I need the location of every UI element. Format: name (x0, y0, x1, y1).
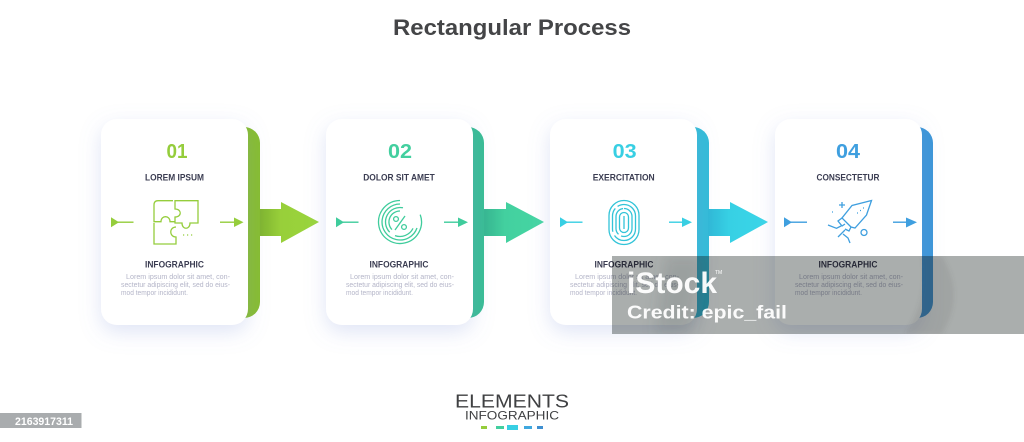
watermark band (612, 256, 1024, 334)
output arrow (444, 218, 468, 227)
icon: rocket (828, 200, 872, 243)
image id badge: 2163917311 (15, 416, 73, 428)
number 03: 03 (613, 141, 637, 163)
watermark credit: Credit: epic_fail (627, 302, 787, 322)
output arrow (220, 218, 244, 227)
arrow: step 1 to 2 (260, 202, 319, 243)
input arrow (784, 217, 807, 227)
body text: mod tempor incididunt. (570, 290, 637, 297)
watermark brand: iStock (627, 267, 717, 300)
back tab: step 1 (215, 127, 260, 318)
heading: dolor sit amet: DOLOR SIT AMET (363, 173, 435, 183)
label: infographic: INFOGRAPHIC (370, 260, 429, 270)
label: infographic: INFOGRAPHIC (818, 260, 878, 270)
trademark: TM (715, 270, 722, 276)
back tab: step 4 (889, 127, 933, 318)
panel: step 3 (550, 119, 768, 325)
back tab: step 2 (440, 127, 484, 318)
body text: sectetur adipiscing elit, sed do eius- (570, 282, 680, 289)
panel: step 1 (101, 119, 319, 325)
card: step 2 (326, 119, 473, 325)
body text: Lorem ipsum dolor sit amet, con- (575, 274, 680, 281)
icon: puzzle (154, 201, 198, 244)
body text: sectetur adipiscing elit, sed do eius- (121, 282, 231, 289)
arrow: step 3 to 4 (708, 202, 768, 243)
output arrow (893, 218, 917, 228)
number 02: 02 (388, 141, 412, 163)
heading: exercitation: EXERCITATION (593, 173, 655, 183)
card: step 3 (550, 119, 697, 325)
body text: mod tempor incididunt. (121, 290, 188, 297)
arrow: step 2 to 3 (484, 202, 544, 243)
input arrow (111, 217, 134, 227)
logo: elements infographic (455, 390, 569, 430)
back tab: step 3 (664, 127, 709, 318)
number 04: 04 (836, 141, 861, 163)
body text: mod tempor incididunt. (795, 290, 862, 297)
input arrow (336, 217, 358, 227)
logo word: elements: ELEMENTS (455, 390, 569, 412)
card: step 1 (101, 119, 248, 325)
heading: lorem ipsum: LOREM IPSUM (145, 173, 204, 183)
label: infographic: INFOGRAPHIC (594, 260, 654, 270)
body text: sectetur adipiscing elit, sed do eius- (346, 282, 455, 289)
title: Rectangular Process (393, 15, 631, 40)
heading: consectetur: CONSECTETUR (816, 173, 880, 183)
number 01: 01 (166, 141, 188, 163)
body text: Lorem ipsum dolor sit amet, con- (799, 274, 904, 281)
body text: Lorem ipsum dolor sit amet, con- (126, 274, 231, 281)
input arrow (560, 217, 582, 227)
card: step 4 (775, 119, 922, 325)
panel: step 4 (775, 119, 933, 325)
panel: step 2 (326, 119, 544, 325)
body text: mod tempor incididunt. (346, 290, 413, 297)
label: infographic: INFOGRAPHIC (145, 260, 205, 270)
logo word: infographic: INFOGRAPHIC (465, 408, 559, 422)
body text: sectetur adipiscing elit, sed do eius- (795, 282, 904, 289)
output arrow (669, 218, 692, 227)
image id badge (0, 413, 82, 428)
logo color dashes (481, 425, 543, 430)
body text: Lorem ipsum dolor sit amet, con- (350, 274, 455, 281)
icon: percent radar (379, 200, 422, 243)
icon: fingerprint (609, 200, 639, 244)
